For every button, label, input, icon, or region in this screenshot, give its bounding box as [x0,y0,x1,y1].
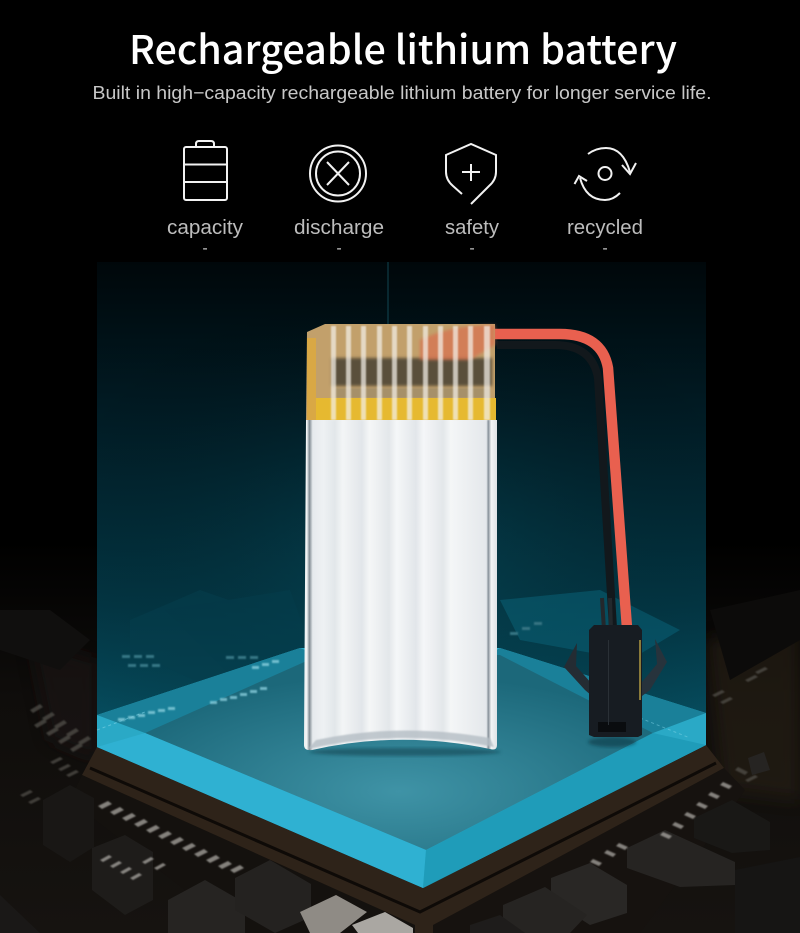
subtitle: Built in high−capacity rechargeable lithium battery for longer service life. [92,82,712,103]
feature: recycled: recycled [567,217,643,239]
feature: recycled: - [602,240,608,257]
title: Rechargeable lithium battery [129,19,677,76]
back wall [97,262,706,888]
rim: back portion [97,648,330,733]
feature icons row [167,141,643,257]
chip package base [70,745,745,933]
connector shadow [588,737,636,747]
rim: lower faces [97,733,426,888]
icon: recycle arrows [574,148,636,200]
feature: capacity [167,141,243,257]
feature: discharge: - [336,240,342,257]
icon: battery [184,141,227,200]
feature: recycled [567,148,643,257]
pcb pattern behind wall [122,590,680,690]
board components left [0,785,413,933]
solder pad rows [98,782,732,880]
feature: discharge: discharge [294,217,384,239]
pad rows on rim [118,660,279,721]
feature: safety: - [469,240,475,257]
feature: safety [445,144,499,257]
yellow kapton band [316,398,496,420]
foil body [304,420,497,750]
board components right [470,800,800,933]
floor: inner surface [145,655,653,850]
floor: bright rim [97,648,706,888]
feature: capacity: - [202,240,208,257]
feature: discharge [294,146,384,257]
background circuit board [0,540,800,933]
feature: safety: safety [445,217,499,239]
icon: shield with plus [446,144,496,204]
cube edge glow [97,712,145,730]
lithium battery [304,324,497,750]
translucent cube [97,262,706,888]
red wire [495,334,627,628]
battery shadow [309,748,501,756]
black wire [497,345,613,628]
feature: capacity: capacity [167,217,243,239]
tab section [306,324,495,420]
clear tape stripes [331,326,490,420]
wires [495,334,627,630]
connector [564,625,667,737]
icon: crossed circle [310,146,366,202]
